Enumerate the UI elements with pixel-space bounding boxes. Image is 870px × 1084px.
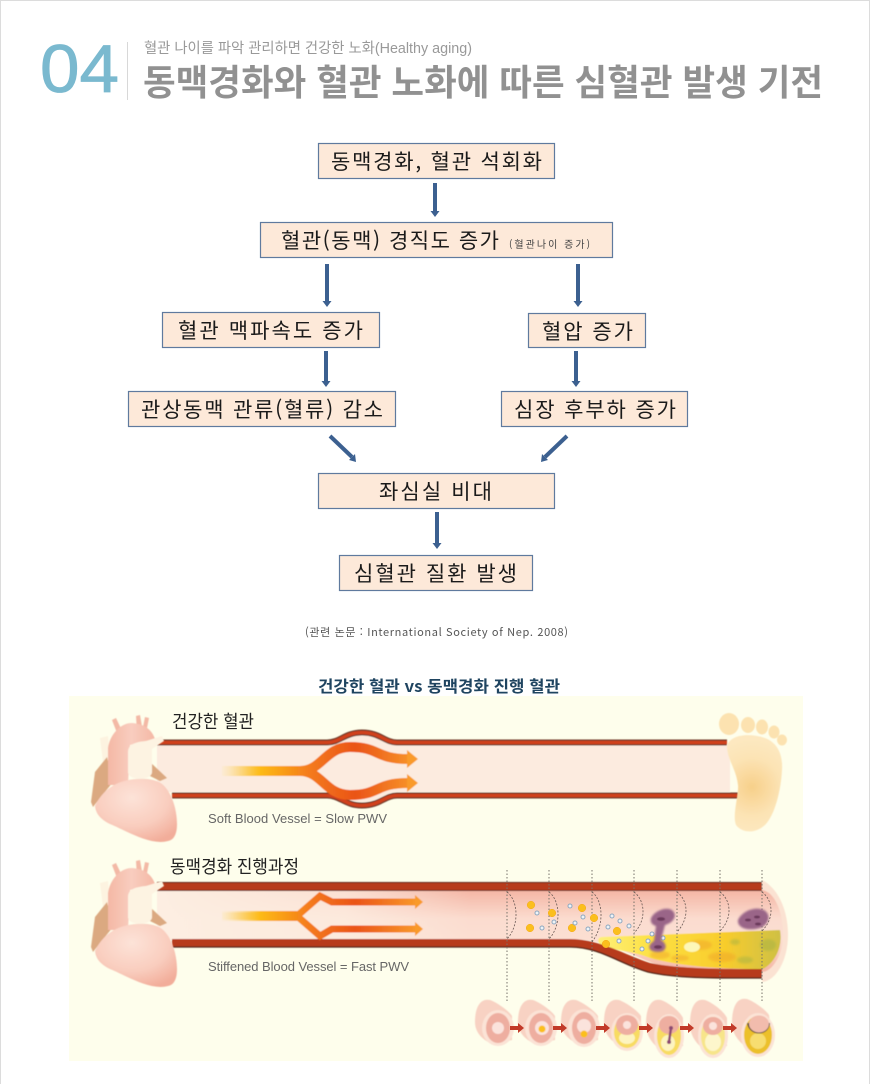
label: atherosclerosis progression: 동맥경화 진행과정: [170, 853, 299, 879]
icon: heart healthy: [91, 715, 177, 842]
subtitle: 혈관 나이를 파악 관리하면 건강한 노화(Healthy aging): [144, 40, 472, 57]
stage 5: [646, 1000, 684, 1058]
vessel interior: [157, 735, 730, 802]
arrow: diagonal left: [330, 436, 356, 462]
arrow: down to coronary: [322, 351, 330, 387]
box: vessel stiffness: 혈관(동맥) 경직도 증가: [281, 225, 499, 255]
box: cardiovascular disease: 심혈관 질환 발생: [354, 558, 517, 588]
stage 6: [690, 1000, 728, 1058]
box: LV hypertrophy: 좌심실 비대: [379, 476, 492, 506]
box: vessel stiffness: [260, 222, 612, 258]
stage guide lines: [507, 870, 771, 1003]
panel background: [69, 696, 803, 1061]
stiffened vessel: [157, 880, 788, 982]
upper wall: [157, 732, 727, 742]
upper wall: [157, 882, 762, 891]
stage 3: [561, 1000, 600, 1047]
lower wall: [172, 796, 738, 806]
icon: heart stiffened: [91, 860, 177, 987]
lower wall: [172, 939, 762, 978]
citation: (관련 논문 : International Society of Nep. 2008): [305, 624, 568, 640]
stage 2: [518, 1000, 557, 1046]
stage 1: [475, 1000, 514, 1046]
section heading: 건강한 혈관 vs 동맥경화 진행 혈관: [318, 673, 560, 697]
arrow: left branch: [322, 264, 332, 307]
section number: 04: [40, 31, 119, 107]
lipid particles: [526, 901, 665, 951]
arrow: diagonal right: [541, 436, 567, 462]
flow arrows: [222, 747, 408, 771]
header divider: [127, 42, 128, 100]
arrow: down to stiffness: [430, 183, 440, 217]
box: blood pressure: [528, 314, 646, 348]
title: 동맥경화와 혈관 노화에 따른 심혈관 발생 기전: [143, 54, 823, 106]
box: vessel stiffness: (혈관나이 증가): [509, 236, 590, 251]
flowchart: [128, 144, 688, 590]
stage arrows: [510, 1023, 737, 1033]
box: pulse wave velocity: 혈관 맥파속도 증가: [178, 315, 363, 345]
plaque: [598, 930, 781, 969]
cross-section stages: [475, 999, 775, 1058]
box: LV hypertrophy: [318, 474, 554, 508]
end cap: [762, 880, 788, 982]
label: soft vessel caption: Soft Blood Vessel = Slow PWV: [208, 811, 387, 826]
arrow: down to cardiac afterload: [572, 351, 580, 387]
box: blood pressure: 혈압 증가: [542, 316, 633, 346]
box: arteriosclerosis: 동맥경화, 혈관 석회화: [331, 146, 542, 176]
panel: vessel illustration: [69, 696, 803, 1061]
arrow: down to CVD: [432, 512, 442, 549]
label: stiffened vessel caption: Stiffened Blood Vessel = Fast PWV: [208, 959, 409, 974]
vessel interior: [157, 890, 783, 972]
stage 7: [732, 999, 775, 1057]
stage 4: [604, 1000, 643, 1051]
arrow: right branch: [574, 264, 582, 307]
label: healthy vessel: 건강한 혈관: [172, 708, 254, 734]
header: [40, 31, 823, 107]
icon: foot: [719, 713, 787, 831]
box: coronary perfusion: 관상동맥 관류(혈류) 감소: [141, 394, 383, 424]
plaque lesions: [649, 909, 769, 952]
flow arrows: [222, 896, 416, 916]
healthy vessel: [157, 732, 738, 806]
box: cardiac afterload: 심장 후부하 증가: [514, 394, 676, 424]
